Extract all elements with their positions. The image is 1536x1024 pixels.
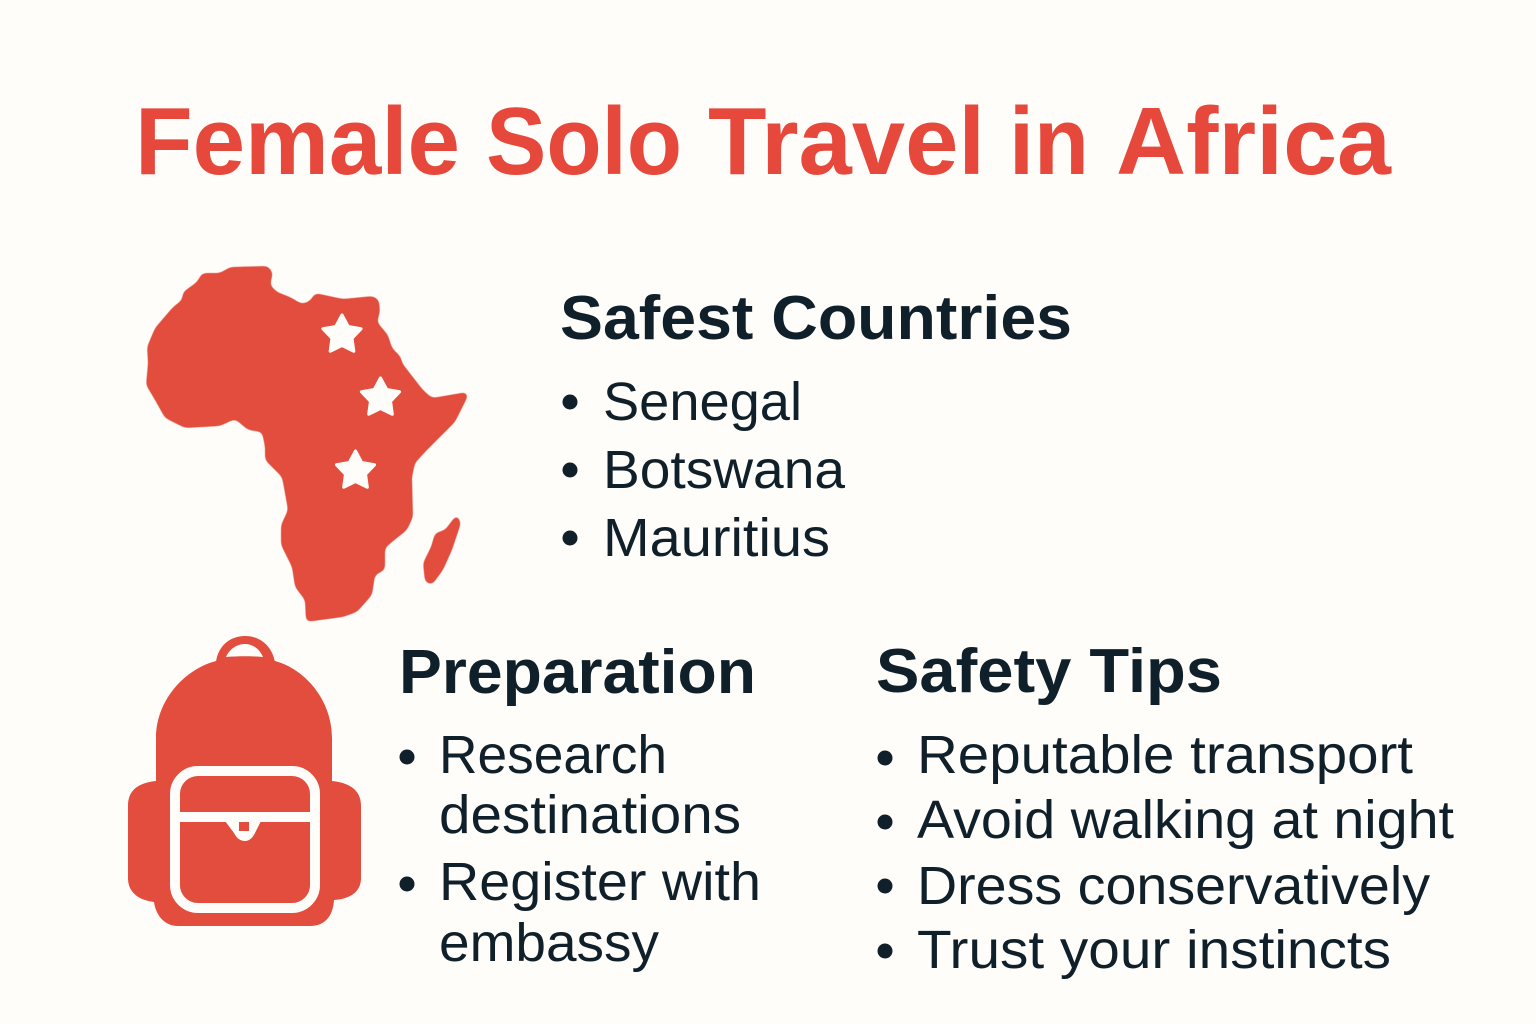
list item: register with embassy <box>400 852 761 973</box>
star 1 <box>323 315 361 351</box>
panel: preparation <box>399 638 761 973</box>
list item: research destinations <box>400 725 741 845</box>
panel: safety tips <box>876 637 1454 980</box>
heading: preparation: Preparation <box>399 638 756 707</box>
title: in <box>1009 88 1089 195</box>
title <box>135 88 1392 195</box>
list item: avoid walking at night: Avoid walking at night <box>917 790 1454 850</box>
star 3 <box>336 451 375 487</box>
backpack pocket <box>175 771 315 908</box>
backpack handle <box>216 636 275 662</box>
list item: dress conservatively: Dress conservatively <box>917 856 1430 916</box>
list item: Botswana: Botswana <box>603 440 846 500</box>
Africa mainland and Madagascar <box>146 266 468 622</box>
list item: research destinations: Research <box>439 725 667 785</box>
title: Africa <box>1116 88 1392 195</box>
list item: trust your instincts: Trust your instincts <box>917 920 1391 980</box>
backpack body <box>128 659 361 926</box>
list item: research destinations: destinations <box>439 785 741 845</box>
list item: register with embassy: embassy <box>439 913 659 973</box>
panel: safest countries <box>560 284 1072 568</box>
title: Female <box>135 88 460 195</box>
list item: register with embassy: Register with <box>439 852 761 912</box>
pocket flap with buckle <box>175 812 315 841</box>
title: Solo <box>486 88 682 195</box>
list item: Senegal: Senegal <box>603 372 802 432</box>
heading: safest countries: Safest Countries <box>560 284 1072 353</box>
icon: backpack <box>128 636 361 926</box>
icon: map of Africa with stars <box>146 266 468 622</box>
title: Travel <box>708 88 985 195</box>
list item: Mauritius: Mauritius <box>603 508 830 568</box>
heading: safety tips: Safety Tips <box>876 637 1222 706</box>
list item: reputable transport: Reputable transport <box>917 725 1413 785</box>
star 2 <box>361 378 400 414</box>
